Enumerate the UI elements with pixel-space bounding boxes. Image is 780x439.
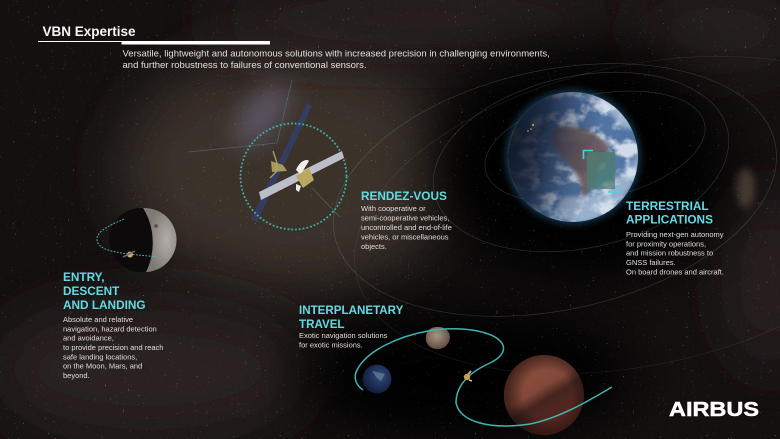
body: objects.	[361, 242, 387, 251]
rendez-vous satellite scene	[188, 80, 346, 230]
spacecraft	[464, 371, 472, 381]
block: terrestrial applications	[626, 199, 724, 276]
solar panel	[259, 151, 344, 200]
block: rendez-vous	[361, 189, 452, 251]
clouds	[585, 95, 636, 130]
body: uncontrolled and end-of-life	[361, 223, 452, 232]
heading: APPLICATIONS	[626, 212, 713, 226]
body: vehicles, or miscellaneous	[361, 232, 449, 242]
body: With cooperative or	[361, 204, 426, 213]
orbit lines around Earth	[310, 8, 780, 422]
body: navigation, hazard detection	[63, 324, 157, 333]
heading: AND LANDING	[63, 298, 146, 312]
body: Providing next-gen autonomy	[626, 230, 724, 239]
planet Earth with monitored area	[505, 90, 641, 224]
inspection lines	[188, 80, 340, 217]
interplanetary scene	[355, 327, 612, 435]
heading: TRAVEL	[299, 318, 345, 331]
Mars	[504, 355, 584, 435]
heading: ENTRY,	[63, 270, 105, 284]
lander	[123, 251, 135, 258]
block: entry, descent and landing	[63, 270, 163, 380]
intro text: and further robustness to failures of conventional sensors.	[122, 60, 366, 71]
Moon with landing trajectory	[97, 208, 177, 272]
Airbus logo: AIRBUS	[669, 398, 759, 421]
body: On board drones and aircraft.	[626, 267, 724, 276]
dotted capture circle	[240, 124, 346, 230]
asteroid	[426, 327, 450, 349]
title: VBN Expertise	[42, 24, 136, 39]
body: for proximity operations,	[626, 239, 706, 248]
land	[551, 126, 609, 201]
target satellite body	[296, 160, 314, 192]
trajectory	[97, 219, 158, 257]
body: Exotic navigation solutions	[299, 331, 388, 340]
body: semi-cooperative vehicles,	[361, 214, 449, 222]
body: and avoidance,	[63, 334, 114, 343]
body: for exotic missions.	[299, 340, 363, 350]
teal trajectory	[355, 329, 612, 426]
heading: DESCENT	[63, 284, 120, 298]
blue rear panel	[251, 103, 312, 222]
body: on the Moon, Mars, and	[63, 362, 142, 371]
block: interplanetary travel	[299, 304, 404, 350]
heading: INTERPLANETARY	[299, 304, 404, 317]
title rule	[38, 41, 270, 44]
heading: RENDEZ-VOUS	[361, 189, 447, 203]
body: Absolute and relative	[63, 315, 133, 324]
intro text: Versatile, lightweight and autonomous solutions with increased precision in challenging environments,	[122, 48, 550, 60]
heading: TERRESTRIAL	[626, 199, 709, 213]
body: GNSS failures.	[626, 258, 676, 267]
chaser spacecraft	[270, 151, 287, 178]
body: and mission robustness to	[626, 249, 713, 258]
sensor frame	[587, 152, 615, 189]
small Earth	[362, 364, 392, 394]
body: beyond.	[63, 371, 90, 380]
body: safe landing locations,	[63, 352, 137, 361]
body: to provide precision and reach	[63, 343, 163, 352]
